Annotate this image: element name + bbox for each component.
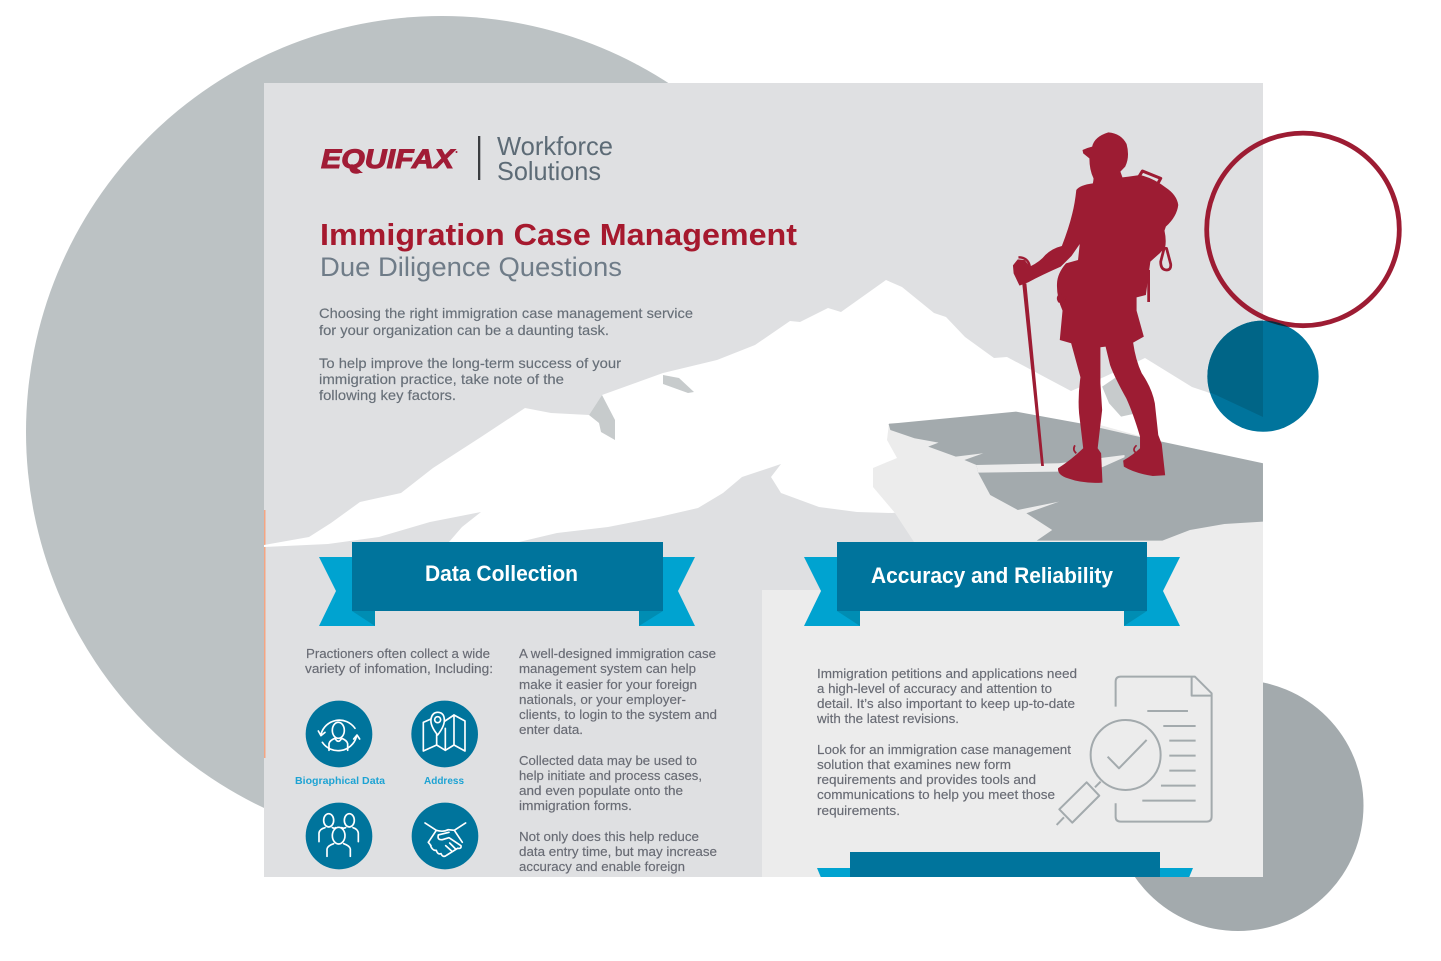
Equifax wordmark: EQUIFAX — [321, 144, 456, 174]
ring overlap on blue circle — [1265, 320, 1289, 327]
data collection body text: nationals, or your employer- — [519, 693, 686, 707]
accuracy body text: requirements. — [817, 804, 900, 818]
accuracy body text: Immigration petitions and applications need — [817, 667, 1077, 681]
icon: address map — [411, 701, 478, 767]
intro text: To help improve the long-term success of your — [319, 355, 621, 371]
intro text: immigration practice, take note of the — [319, 371, 564, 387]
accuracy body text: detail. It’s also important to keep up-to-date — [817, 697, 1075, 711]
strap — [1147, 270, 1150, 302]
data collection lead text: variety of infomation, Including: — [305, 662, 493, 676]
data collection body text: Collected data may be used to — [519, 754, 697, 768]
title: Immigration Case Management — [320, 218, 797, 252]
logo — [320, 136, 612, 180]
data collection body text: help initiate and process cases, — [519, 769, 702, 783]
small grey background circle — [1112, 680, 1364, 931]
accuracy body text: solution that examines new form — [817, 758, 1011, 772]
ribbon: data collection: Data Collection — [425, 561, 578, 586]
data collection body text: and even populate onto the — [519, 784, 683, 798]
icon: handshake — [412, 803, 478, 869]
ribbon: accuracy and reliability: Accuracy and Reliability — [871, 563, 1113, 588]
data collection body text — [519, 647, 717, 874]
label: biographical data: Biographical Data — [295, 775, 385, 787]
trekking pole — [1022, 283, 1044, 466]
intro text — [319, 305, 693, 403]
carabiner — [1161, 248, 1171, 270]
logo: Solutions — [497, 156, 601, 186]
data collection lead text — [305, 647, 493, 676]
blue accent circle — [1207, 321, 1319, 432]
accuracy body text: with the latest revisions. — [816, 712, 959, 726]
ribbon: data collection — [319, 542, 695, 626]
data collection lead text: Practioners often collect a wide — [306, 647, 490, 661]
accuracy body text: communications to help you meet those — [817, 788, 1055, 802]
data collection body text: clients, to login to the system and — [519, 708, 717, 722]
mountain illustration — [264, 280, 1263, 600]
large grey background circle — [26, 16, 858, 848]
icon: family group — [306, 803, 372, 869]
data collection body text: management system can help — [519, 662, 696, 676]
document page — [264, 83, 1263, 880]
accuracy body text: Look for an immigration case management — [817, 743, 1072, 757]
accuracy body text: a high-level of accuracy and attention to — [817, 682, 1052, 696]
data collection body text: immigration forms. — [519, 799, 632, 813]
icon grid — [295, 701, 478, 869]
Workforce Solutions wordmark: Workforce — [497, 131, 613, 161]
accuracy body text: requirements and provides tools and — [817, 773, 1036, 787]
backpack handle — [1139, 171, 1161, 184]
red outline ring — [1207, 133, 1399, 326]
hiker silhouette — [1013, 132, 1178, 483]
intro text: for your organization can be a daunting task. — [319, 322, 609, 338]
icon: biographical data — [306, 701, 372, 767]
ribbon: third section, cropped — [817, 852, 1193, 877]
subtitle: Due Diligence Questions — [320, 252, 622, 282]
data collection body text: A well-designed immigration case — [519, 647, 716, 661]
icon: document with magnifier — [1057, 677, 1212, 825]
intro text: following key factors. — [319, 387, 456, 403]
data collection body text: accuracy and enable foreign — [519, 860, 685, 874]
accuracy body text — [816, 667, 1077, 818]
data collection body text: make it easier for your foreign — [519, 678, 697, 692]
data collection body text: enter data. — [519, 723, 583, 737]
label: address: Address — [424, 775, 464, 787]
data collection body text: data entry time, but may increase — [519, 845, 717, 859]
data collection body text: Not only does this help reduce — [519, 830, 699, 844]
intro text: Choosing the right immigration case management service — [319, 305, 693, 321]
ribbon: accuracy and reliability — [804, 542, 1180, 626]
